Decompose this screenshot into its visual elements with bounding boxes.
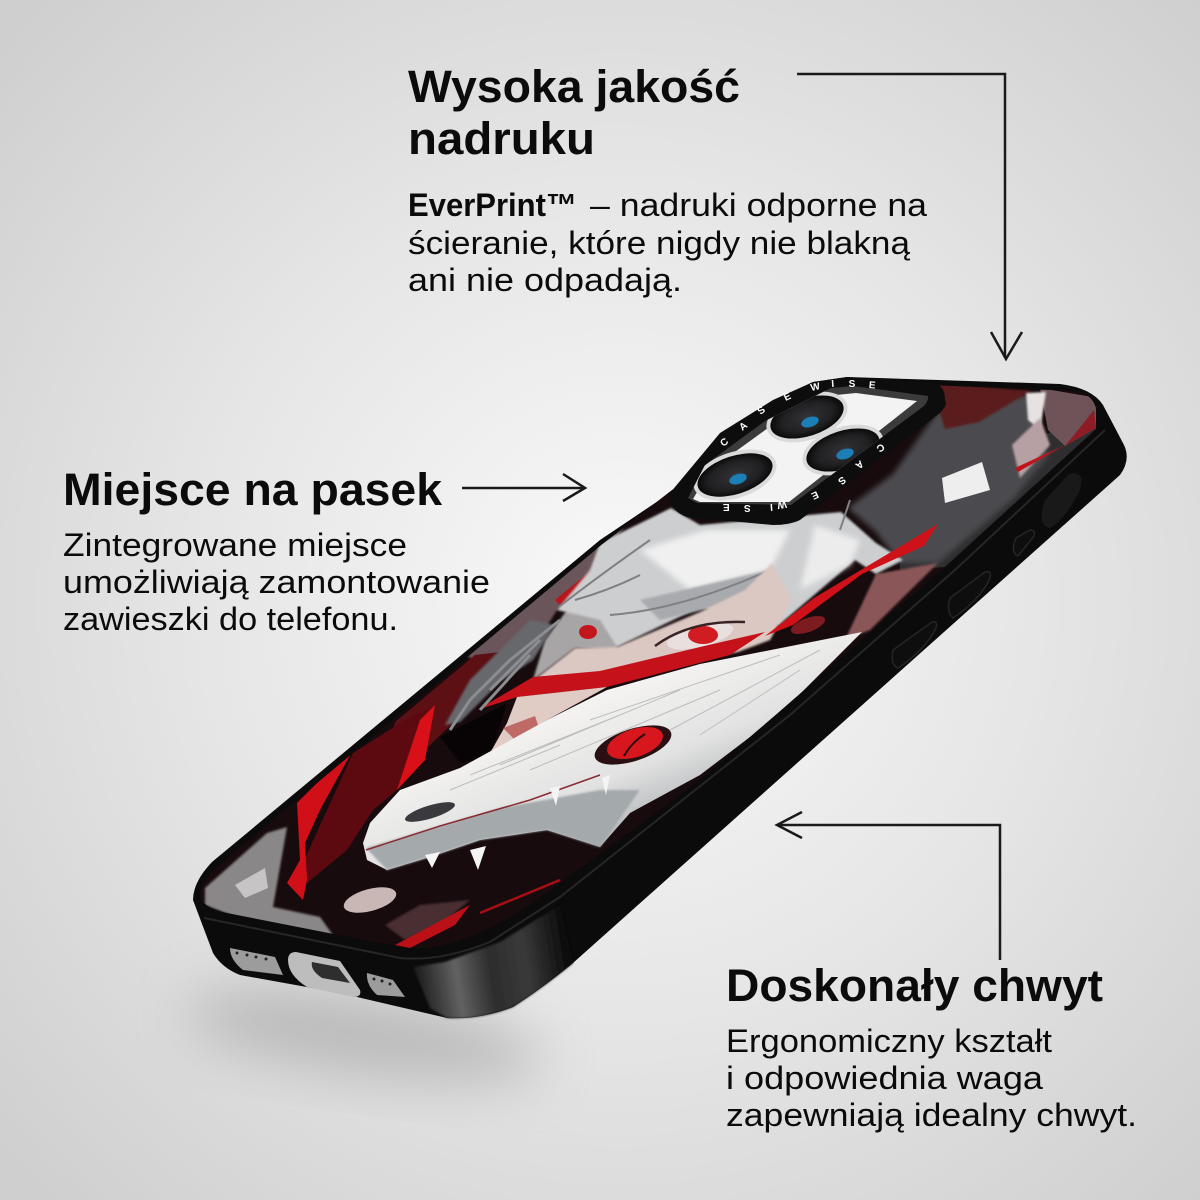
lens housing (760, 382, 854, 452)
bottom left speaker (230, 948, 283, 975)
text block: grip (726, 960, 1137, 1133)
camera ring (670, 377, 946, 525)
phone shadow (181, 970, 549, 1100)
lens glass (801, 420, 885, 480)
body: strap point: Zintegrowane miejsce (63, 527, 407, 563)
red streak upper (765, 524, 938, 636)
dragon teeth (425, 775, 610, 870)
ring brand lower: CASEWISE (723, 441, 886, 513)
top dark red hair (939, 385, 1030, 430)
grey strand band (445, 620, 555, 725)
black void (440, 703, 507, 763)
case rim (204, 430, 1105, 959)
white streak top right (1026, 392, 1046, 430)
eye socket (590, 717, 676, 773)
body: strap point: zawieszki do telefonu. (63, 601, 398, 637)
charging port (288, 952, 360, 997)
camera glass (693, 393, 917, 502)
bottom right speaker (367, 973, 405, 997)
heading: grip: Doskonały chwyt (726, 960, 1103, 1011)
volume up button (949, 572, 990, 618)
volume down button (892, 622, 936, 668)
grey strands (450, 620, 560, 730)
grey face patch (533, 610, 620, 680)
red iris (603, 721, 667, 765)
lower right dark cloak (900, 420, 1100, 570)
speaker holes (236, 952, 392, 986)
blue reflection (728, 471, 748, 487)
left red strands (555, 571, 590, 606)
port opening (312, 962, 350, 983)
lower skin (490, 687, 607, 753)
lens housing (796, 415, 890, 485)
dark base (200, 388, 1087, 948)
face skin (534, 563, 792, 680)
lenses (687, 382, 890, 510)
camera module (670, 377, 946, 525)
text block: print quality (408, 61, 927, 298)
ring brand upper: CASEWISE (718, 379, 876, 449)
body: print quality: ścieranie, które nigdy nie blakną (408, 225, 910, 261)
slit pupil (624, 734, 645, 756)
camera inner wall (688, 386, 928, 505)
white hair mass (557, 508, 903, 647)
body: print quality: ani nie odpadają. (408, 262, 682, 298)
top right red accent (1065, 410, 1096, 446)
lens glass (692, 445, 778, 505)
text block: strap point (63, 464, 490, 637)
hair strokes (560, 500, 850, 615)
lens glass (765, 387, 849, 447)
action button (1013, 530, 1034, 556)
lower round shape (341, 882, 399, 918)
side buttons (892, 473, 1082, 668)
side slot (1041, 473, 1082, 528)
red wing dark (306, 727, 404, 883)
dragon eye (590, 717, 676, 773)
left dark red (394, 652, 499, 748)
hair highlight right (800, 525, 860, 590)
thin red strand top right (1015, 445, 1065, 472)
blue reflection (800, 414, 820, 430)
lens housing (687, 440, 783, 510)
pink patch (1012, 418, 1050, 478)
arrow: grip (777, 812, 1000, 960)
bright red stripe mid (397, 705, 435, 790)
arrow: strap point (462, 474, 585, 501)
white patch (942, 462, 990, 503)
body: strap point (63, 527, 490, 637)
heading: strap point: Miejsce na pasek (63, 464, 443, 515)
upper right grey cloak (848, 394, 1048, 563)
lower muted fabric (385, 900, 470, 940)
blue reflection (835, 446, 855, 462)
port surround (288, 952, 360, 997)
eye white (667, 624, 733, 650)
small eye of character (579, 625, 597, 639)
top lens (760, 382, 854, 452)
lower red streaks (395, 905, 470, 948)
dragon nostril (403, 798, 457, 826)
case body (193, 377, 1127, 1018)
left mauve band (465, 525, 625, 668)
lower red band (477, 632, 765, 710)
heading: print quality: nadruku (408, 113, 595, 164)
upper eyelid (655, 622, 745, 646)
dragon (363, 632, 862, 870)
glossy corner highlight (413, 905, 573, 1018)
body: print quality: – nadruki odporne na (590, 187, 927, 223)
body: grip: Ergonomiczny kształt (726, 1023, 1052, 1059)
lower red line (480, 880, 560, 913)
top right grey red (1040, 388, 1098, 446)
hair highlight (640, 530, 790, 590)
lips (503, 716, 538, 740)
printed artwork (200, 385, 1096, 948)
corner highlight (235, 868, 268, 898)
dragon mouth line (366, 775, 600, 850)
right lens (796, 415, 890, 485)
reddish grey patch (845, 563, 938, 640)
body: grip: i odpowiednia waga (726, 1060, 1043, 1096)
body: strap point: umożliwiają zamontowanie (63, 564, 490, 600)
grey bottom left corner (204, 826, 334, 934)
arrow: top print quality (797, 74, 1022, 359)
heading: print quality: Wysoka jakość (408, 61, 740, 112)
body: print quality: EverPrint™ (408, 187, 577, 223)
dragon jaw shadow (366, 790, 640, 870)
body: grip (726, 1023, 1137, 1133)
phone case (180, 370, 1127, 1018)
body: print quality (408, 187, 927, 298)
body: grip: zapewniają idealny chwyt. (726, 1097, 1137, 1133)
left lens (687, 440, 783, 510)
left eye of character (654, 620, 746, 650)
hair shadow (640, 570, 770, 620)
right eye of character (790, 616, 826, 634)
dragon head and neck (363, 632, 862, 870)
scale lines (450, 650, 820, 790)
bright red stripe left (287, 750, 353, 900)
iris (688, 626, 718, 644)
heading: print quality (408, 61, 740, 164)
